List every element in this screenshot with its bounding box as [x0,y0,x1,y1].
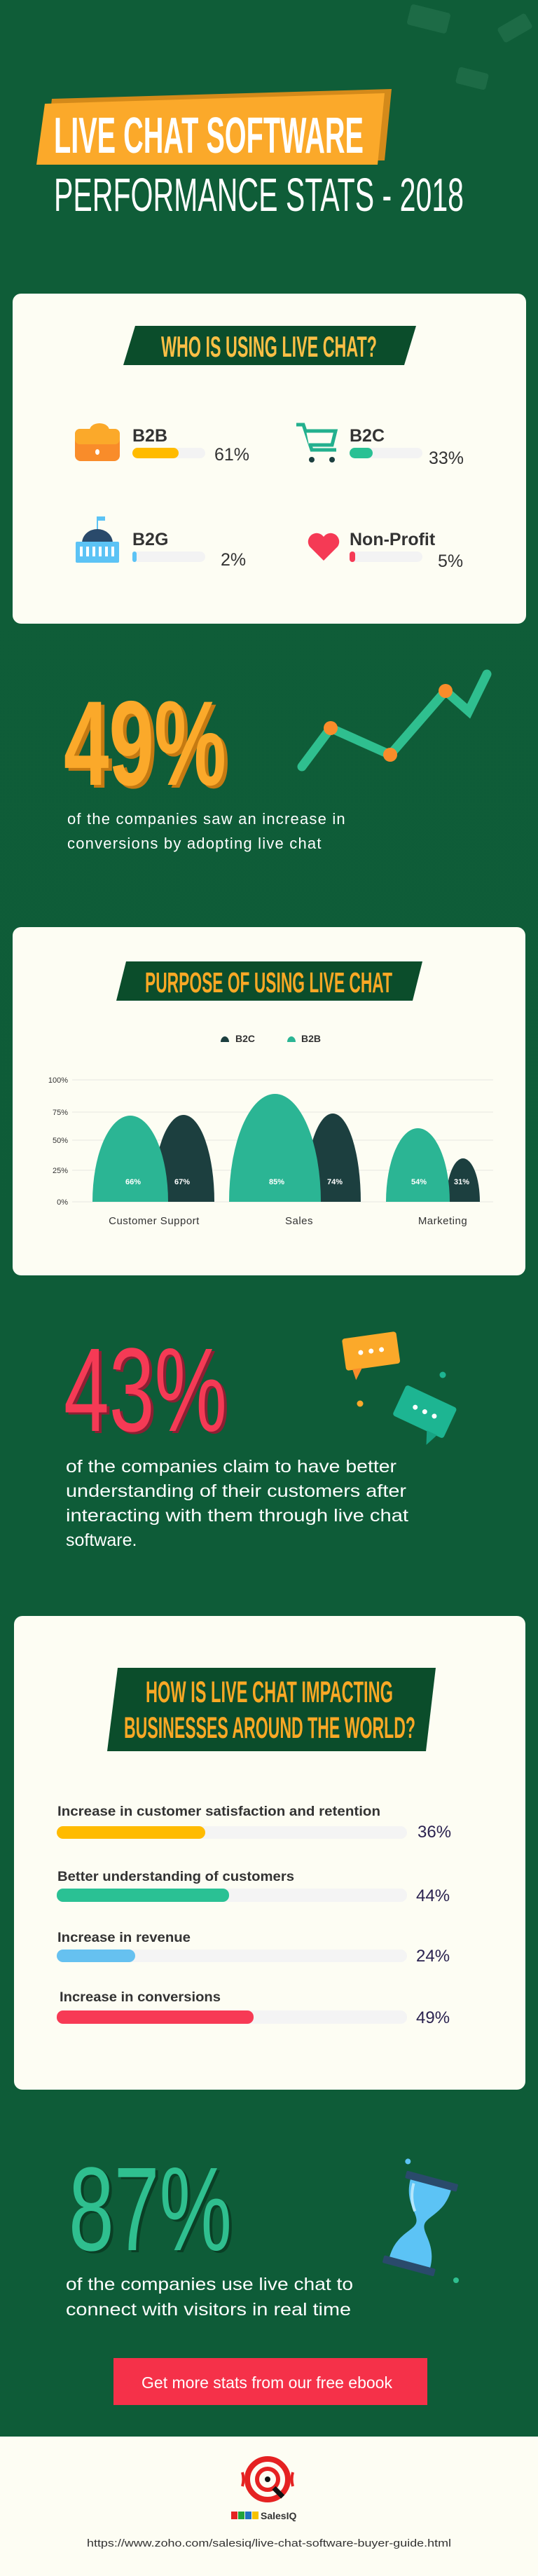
chart: dome bars: 74% [327,1178,343,1186]
chart: dome bars: Sales [285,1215,313,1227]
decorative chat bubbles top [406,4,533,90]
stat: 43%: 43% [67,1326,230,1459]
bar: understanding: 44% [416,1886,450,1905]
heading: who is using [123,326,416,365]
chart: dome bars: 25% [53,1167,68,1175]
stat: 87%: 87% [71,2145,235,2278]
bar: conversions: 49% [416,2008,450,2027]
logo: Zoho SalesIQ: SalesIQ [261,2510,296,2521]
chart: dome bars [48,1076,493,1227]
Non-profit stat [350,530,463,571]
B2C stat: B2C [350,426,385,446]
bar: revenue [57,1931,450,1966]
icon: government building [76,516,119,563]
text: 43% description [66,1457,408,1550]
B2C stat [350,426,464,468]
bar: satisfaction: Increase in customer satisfaction and retention [57,1804,380,1819]
B2G stat: 2% [221,550,246,570]
heading: purpose [116,961,422,1001]
chart: dome bars: 54% [411,1178,427,1186]
stat: 43%: 43% [64,1324,227,1457]
text: 43% description: software. [66,1530,137,1550]
bar: satisfaction: 36% [418,1823,451,1842]
Non-profit stat: 5% [438,551,463,571]
text: 49% description [67,810,346,852]
stat: 87% [66,2143,353,2320]
bar: understanding [57,1870,450,1905]
chart: dome bars: 75% [53,1109,68,1117]
chart: dome bars: 67% [174,1178,190,1186]
text: 43% description: interacting with them through live chat [66,1506,408,1526]
icon: briefcase [75,423,120,461]
text: 87% description [66,2275,353,2320]
icon: cart [296,425,336,463]
button: CTA: Get more stats from our free ebook [142,2373,392,2392]
bar: conversions: Increase in conversions [60,1990,221,2005]
icon: chat bubbles [342,1331,457,1450]
B2C stat: 33% [429,448,464,468]
text: 49% description: of the companies saw an increase in [67,810,346,828]
stat: 49%: 49% [67,679,230,814]
icon: growth line chart [302,674,487,767]
B2B stat: 61% [214,445,249,465]
B2B stat: B2B [132,426,167,446]
legend [221,1033,321,1044]
chart: dome bars: Marketing [418,1215,467,1227]
logo: Zoho SalesIQ [231,2459,296,2521]
Non-profit stat: Non-Profit [350,530,436,549]
text: 87% description: connect with visitors in real time [66,2300,351,2320]
chart: dome bars: 66% [125,1178,141,1186]
heading: impacting [107,1668,436,1751]
stat: 49%: 49% [64,676,226,811]
B2G stat [132,530,246,570]
icon: hourglass [378,2158,462,2277]
panel: who is using live chat [13,294,526,624]
chart: dome bars: 31% [454,1178,469,1186]
heading: who is using: WHO IS USING LIVE CHAT? [161,330,377,363]
bar: conversions [57,1990,450,2027]
bar: understanding: Better understanding of customers [57,1870,294,1884]
footer url: https://www.zoho.com/salesiq/live-chat-software-buyer-guide.html [87,2537,451,2549]
button: CTA [113,2358,427,2405]
chart: dome bars: 0% [57,1198,68,1207]
B2B stat [132,426,249,465]
chart: dome bars: Customer Support [109,1215,200,1227]
stat: 87%: 87% [69,2143,232,2276]
legend: B2B [301,1033,321,1044]
panel: how is live chat impacting businesses [14,1616,525,2090]
title [36,89,464,221]
text: 43% description: understanding of their customers after [66,1481,406,1501]
chart: dome bars: 100% [48,1076,68,1085]
legend: B2C [235,1033,255,1044]
text: 49% description: conversions by adopting live chat [67,835,322,852]
stat: 43% [64,1324,408,1550]
bar: revenue: 24% [416,1947,450,1966]
panel: purpose of using live chat [13,927,525,1275]
icon: heart [308,533,339,561]
bar: satisfaction [57,1804,451,1842]
chart: dome bars: 50% [53,1137,68,1145]
stat: 49% [64,676,346,852]
B2G stat: B2G [132,530,168,549]
bar: revenue: Increase in revenue [57,1931,191,1945]
chart: dome bars: 85% [269,1178,284,1186]
text: 43% description: of the companies claim to have better [66,1457,396,1477]
text: 87% description: of the companies use live chat to [66,2275,353,2294]
